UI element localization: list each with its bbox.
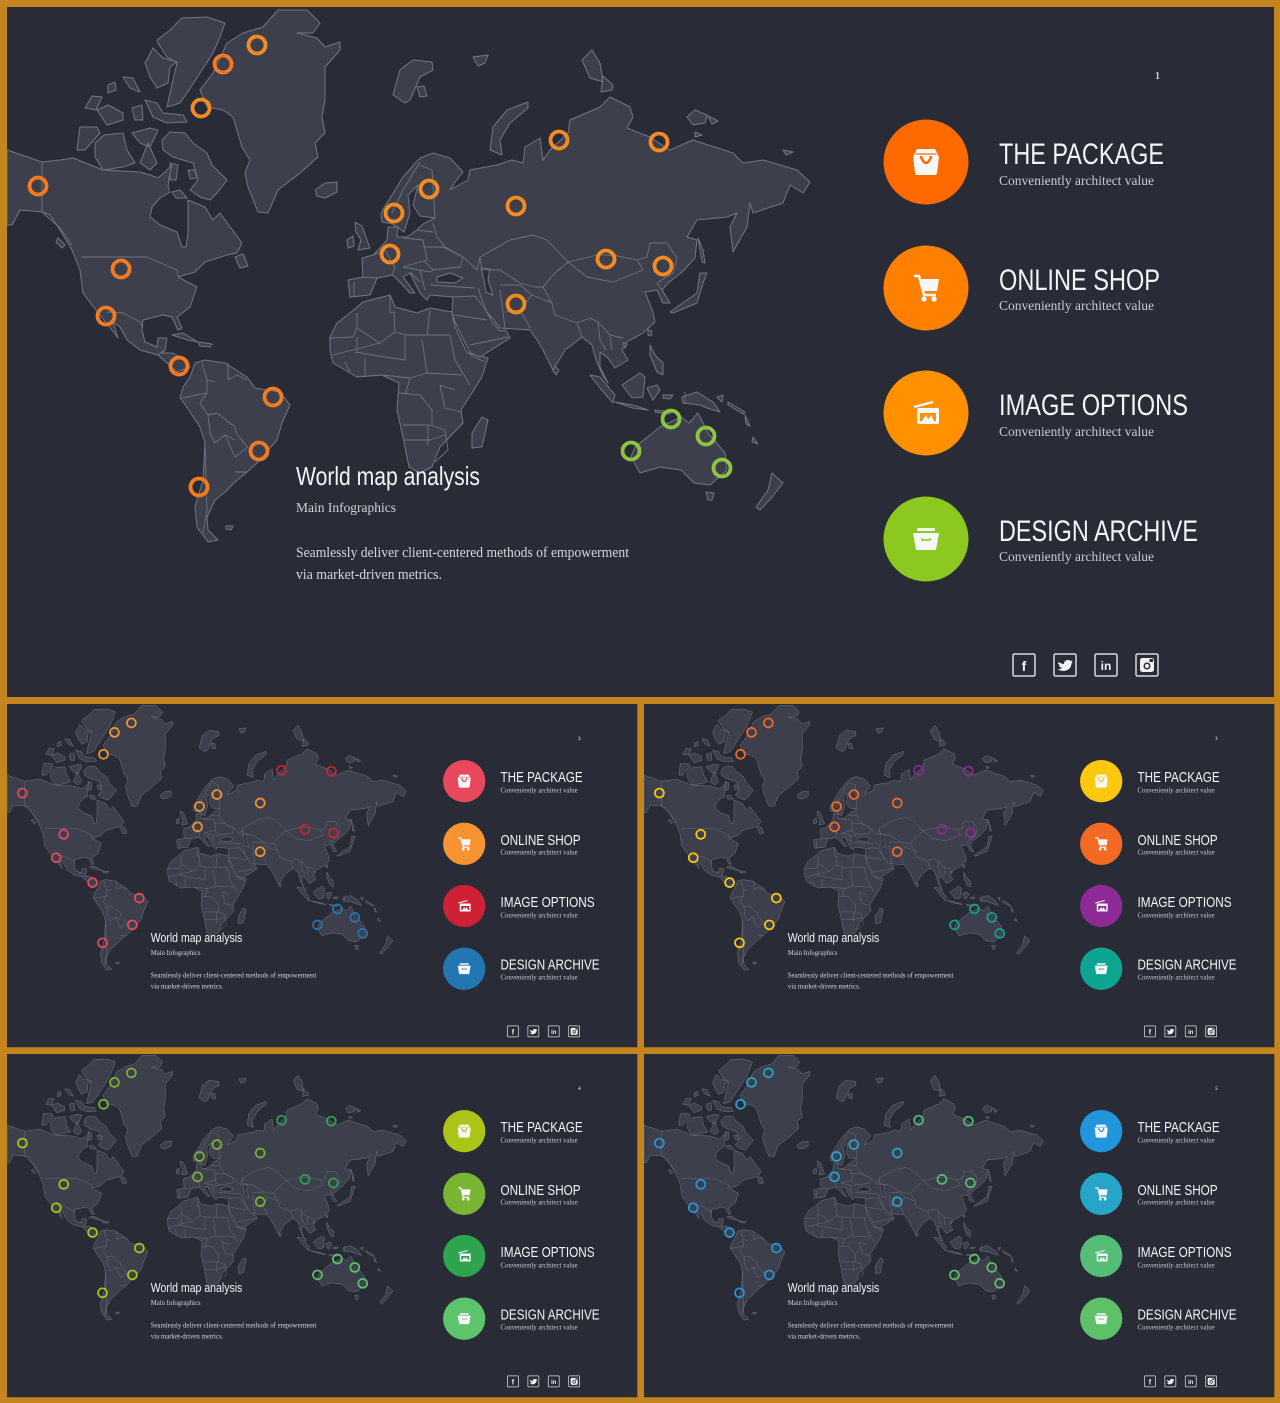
item: online shop: ONLINE SHOP bbox=[1138, 832, 1218, 849]
item: online shop: Conveniently architect value bbox=[1138, 1199, 1215, 1207]
social icons: f bbox=[1149, 1379, 1152, 1386]
item: design archive: DESIGN ARCHIVE bbox=[999, 515, 1198, 548]
social icons bbox=[507, 1026, 580, 1037]
item: design archive: Conveniently architect value bbox=[1138, 1324, 1215, 1332]
item: the package: THE PACKAGE bbox=[1138, 769, 1220, 786]
item: the package: Conveniently architect value bbox=[1138, 787, 1215, 795]
description: Seamlessly deliver client-centered methods of empowerment bbox=[151, 1322, 316, 1330]
item: online shop bbox=[443, 823, 581, 865]
item: online shop: ONLINE SHOP bbox=[999, 264, 1160, 297]
subheading: Main Infographics bbox=[296, 501, 396, 516]
item: online shop: ONLINE SHOP bbox=[501, 832, 581, 849]
item: online shop bbox=[1080, 1173, 1218, 1215]
item: online shop: Conveniently architect value bbox=[999, 299, 1154, 314]
social icons: f bbox=[1149, 1029, 1152, 1036]
item: the package: THE PACKAGE bbox=[1138, 1119, 1220, 1136]
item: the package: THE PACKAGE bbox=[999, 138, 1164, 171]
item: design archive bbox=[884, 496, 1198, 582]
social icons bbox=[1013, 654, 1158, 676]
social icons: in bbox=[551, 1380, 557, 1386]
world map bbox=[644, 1055, 1043, 1320]
world map bbox=[7, 1055, 406, 1320]
item: image options: IMAGE OPTIONS bbox=[501, 894, 595, 911]
description bbox=[788, 1322, 953, 1341]
item: online shop: ONLINE SHOP bbox=[1138, 1182, 1218, 1199]
description: via market-driven metrics. bbox=[151, 1333, 224, 1341]
subheading: Main Infographics bbox=[788, 1299, 838, 1307]
item: online shop: Conveniently architect value bbox=[501, 1199, 578, 1207]
item: online shop bbox=[1080, 823, 1218, 865]
page number: 4 bbox=[578, 1087, 581, 1092]
social icons: f bbox=[512, 1379, 515, 1386]
description: Seamlessly deliver client-centered methods of empowerment bbox=[296, 545, 629, 561]
panel: red variant bbox=[7, 704, 637, 1047]
item: the package bbox=[443, 1110, 583, 1152]
description bbox=[151, 972, 316, 991]
item: image options: Conveniently architect value bbox=[1138, 911, 1215, 919]
item: image options: IMAGE OPTIONS bbox=[999, 389, 1188, 422]
item: image options: Conveniently architect value bbox=[999, 425, 1154, 440]
world map bbox=[644, 705, 1043, 970]
panel: blue variant bbox=[644, 1054, 1274, 1397]
world map bbox=[7, 705, 406, 970]
item: the package: THE PACKAGE bbox=[501, 1119, 583, 1136]
item: image options bbox=[1080, 1235, 1232, 1277]
social icons: in bbox=[1101, 659, 1111, 673]
social icons bbox=[1144, 1376, 1217, 1387]
item: image options bbox=[443, 885, 595, 927]
item: the package: Conveniently architect value bbox=[501, 1137, 578, 1145]
item: image options bbox=[884, 370, 1188, 456]
item: image options: IMAGE OPTIONS bbox=[1138, 894, 1232, 911]
map markers bbox=[30, 36, 730, 496]
social icons bbox=[1144, 1026, 1217, 1037]
item: online shop: Conveniently architect value bbox=[501, 849, 578, 857]
page number: 5 bbox=[1215, 1087, 1218, 1092]
item: image options: Conveniently architect value bbox=[1138, 1261, 1215, 1269]
page number: 2 bbox=[578, 737, 581, 742]
page number: 3 bbox=[1215, 737, 1218, 742]
item: online shop bbox=[443, 1173, 581, 1215]
description bbox=[296, 545, 629, 583]
subheading: Main Infographics bbox=[151, 1299, 201, 1307]
description: Seamlessly deliver client-centered methods of empowerment bbox=[151, 972, 316, 980]
item: the package bbox=[884, 120, 1164, 204]
item: the package bbox=[443, 760, 583, 802]
item: online shop: ONLINE SHOP bbox=[501, 1182, 581, 1199]
item: design archive bbox=[1080, 948, 1237, 990]
item: design archive: DESIGN ARCHIVE bbox=[1138, 957, 1237, 974]
item: design archive: Conveniently architect value bbox=[999, 550, 1154, 565]
heading: World map analysis bbox=[151, 1280, 242, 1295]
map markers bbox=[18, 718, 367, 947]
item: image options: IMAGE OPTIONS bbox=[1138, 1244, 1232, 1261]
item: image options bbox=[443, 1235, 595, 1277]
item: the package: Conveniently architect value bbox=[1138, 1137, 1215, 1145]
item: design archive bbox=[1080, 1298, 1237, 1340]
item: image options: IMAGE OPTIONS bbox=[501, 1244, 595, 1261]
heading: World map analysis bbox=[296, 461, 480, 491]
social icons: in bbox=[1188, 1030, 1194, 1036]
map markers bbox=[18, 1068, 367, 1297]
social icons: in bbox=[1188, 1380, 1194, 1386]
description: via market-driven metrics. bbox=[788, 983, 861, 991]
item: online shop bbox=[884, 246, 1160, 330]
panel: main slide bbox=[7, 7, 1274, 697]
item: the package bbox=[1080, 1110, 1220, 1152]
item: online shop: Conveniently architect value bbox=[1138, 849, 1215, 857]
description: via market-driven metrics. bbox=[788, 1333, 861, 1341]
description: Seamlessly deliver client-centered methods of empowerment bbox=[788, 1322, 953, 1330]
social icons bbox=[507, 1376, 580, 1387]
description: via market-driven metrics. bbox=[296, 567, 442, 583]
social icons: f bbox=[1022, 658, 1027, 674]
item: design archive: Conveniently architect value bbox=[1138, 974, 1215, 982]
panel: green variant bbox=[7, 1054, 637, 1397]
item: image options: Conveniently architect value bbox=[501, 911, 578, 919]
subheading: Main Infographics bbox=[151, 949, 201, 957]
social icons: in bbox=[551, 1030, 557, 1036]
panel: yellow purple variant bbox=[644, 704, 1274, 1047]
world map bbox=[7, 10, 810, 542]
description: via market-driven metrics. bbox=[151, 983, 224, 991]
item: design archive: Conveniently architect value bbox=[501, 1324, 578, 1332]
item: design archive: DESIGN ARCHIVE bbox=[1138, 1307, 1237, 1324]
map markers bbox=[655, 1068, 1004, 1297]
social icons: f bbox=[512, 1029, 515, 1036]
description bbox=[151, 1322, 316, 1341]
map markers bbox=[655, 718, 1004, 947]
item: image options bbox=[1080, 885, 1232, 927]
description: Seamlessly deliver client-centered methods of empowerment bbox=[788, 972, 953, 980]
subheading: Main Infographics bbox=[788, 949, 838, 957]
item: design archive bbox=[443, 948, 600, 990]
item: the package: Conveniently architect value bbox=[999, 174, 1154, 189]
item: the package: THE PACKAGE bbox=[501, 769, 583, 786]
item: design archive: DESIGN ARCHIVE bbox=[501, 957, 600, 974]
item: the package: Conveniently architect value bbox=[501, 787, 578, 795]
item: design archive: DESIGN ARCHIVE bbox=[501, 1307, 600, 1324]
item: design archive: Conveniently architect value bbox=[501, 974, 578, 982]
description bbox=[788, 972, 953, 991]
heading: World map analysis bbox=[788, 1280, 879, 1295]
page number: 1 bbox=[1155, 71, 1160, 82]
heading: World map analysis bbox=[788, 930, 879, 945]
item: design archive bbox=[443, 1298, 600, 1340]
item: image options: Conveniently architect value bbox=[501, 1261, 578, 1269]
heading: World map analysis bbox=[151, 930, 242, 945]
item: the package bbox=[1080, 760, 1220, 802]
